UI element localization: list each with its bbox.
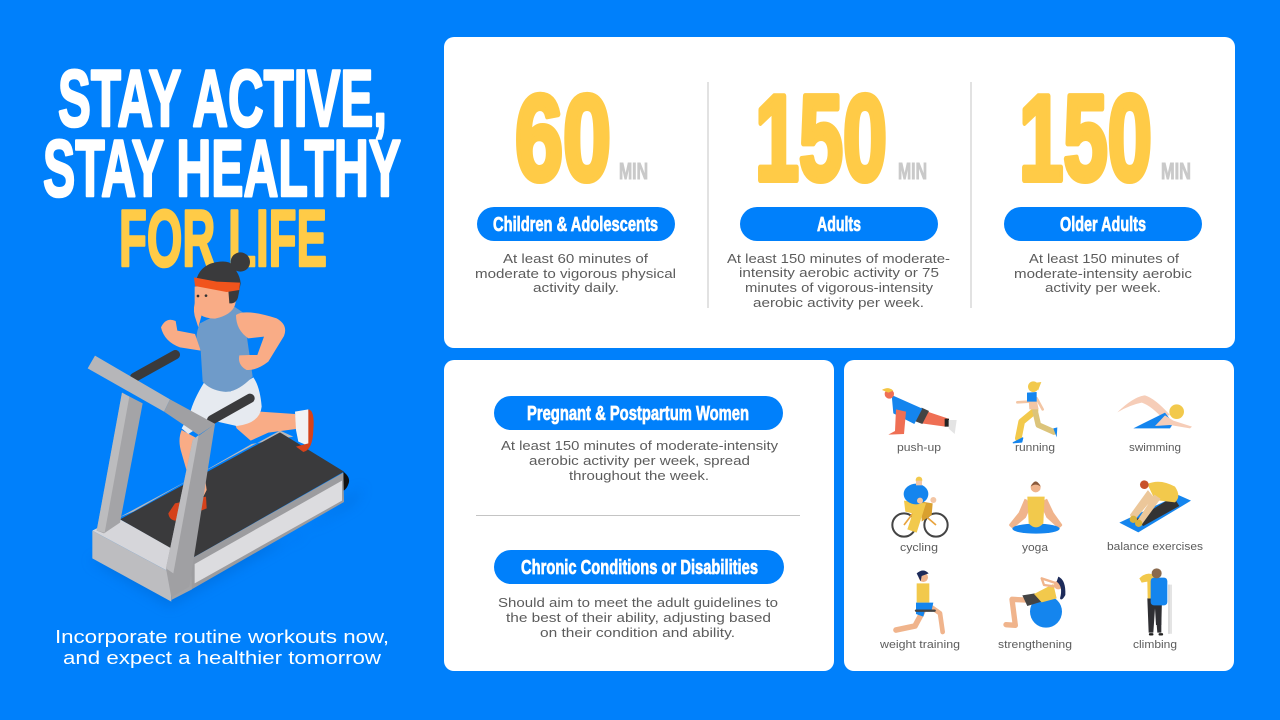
back leg of runner bbox=[233, 409, 314, 452]
front foot of runner bbox=[168, 430, 207, 521]
children stat: 60 bbox=[515, 70, 611, 206]
panel: special populations bbox=[444, 360, 834, 671]
panel: activities bbox=[844, 360, 1234, 671]
label: running: running bbox=[1015, 442, 1055, 454]
chronic conditions text: Should aim to meet the adult guidelines to bbox=[498, 595, 778, 610]
label: swimming: swimming bbox=[1129, 442, 1181, 454]
chronic conditions text: on their condition and ability. bbox=[540, 625, 735, 640]
older adults text: activity per week. bbox=[1045, 280, 1161, 295]
label: push-up: push-up bbox=[897, 442, 941, 454]
shorts bbox=[182, 377, 262, 434]
pregnant text: At least 150 minutes of moderate-intensity bbox=[501, 438, 779, 453]
older adults text: At least 150 minutes of bbox=[1029, 251, 1179, 266]
adults badge: Adults bbox=[817, 214, 861, 236]
icon: yoga bbox=[1011, 481, 1061, 534]
title bbox=[43, 54, 401, 284]
pregnant badge bbox=[494, 396, 783, 430]
chronic conditions text: the best of their ability, adjusting based bbox=[506, 610, 771, 625]
older adults stat: 150 bbox=[1019, 70, 1152, 206]
pregnant text bbox=[501, 438, 779, 483]
panel: age group guidelines bbox=[444, 37, 1235, 348]
illustration: runner on treadmill bbox=[88, 252, 363, 607]
treadmill belt bbox=[119, 431, 349, 559]
children text bbox=[475, 251, 676, 295]
icon: cycling bbox=[892, 477, 948, 537]
chronic conditions badge bbox=[494, 550, 784, 584]
title: STAY ACTIVE, bbox=[58, 54, 387, 144]
icon: climbing bbox=[1139, 568, 1171, 634]
treadmill base bbox=[92, 473, 344, 602]
torso bbox=[196, 306, 253, 392]
icon: push-up bbox=[882, 388, 957, 435]
adults stat: MIN bbox=[898, 158, 927, 184]
adults text: minutes of vigorous-intensity bbox=[745, 280, 934, 295]
chronic conditions text bbox=[498, 595, 778, 640]
label: cycling: cycling bbox=[900, 542, 938, 554]
tagline: Incorporate routine workouts now, bbox=[55, 626, 389, 647]
adults text: aerobic activity per week. bbox=[753, 295, 924, 310]
head bbox=[194, 252, 250, 327]
icon: weight training bbox=[896, 570, 943, 632]
label: balance exercises: balance exercises bbox=[1107, 541, 1204, 553]
older adults stat: MIN bbox=[1161, 158, 1191, 184]
children text: activity daily. bbox=[533, 280, 619, 295]
pregnant text: throughout the week. bbox=[569, 468, 709, 483]
older adults text: moderate-intensity aerobic bbox=[1014, 266, 1193, 281]
older adults badge bbox=[1004, 207, 1202, 241]
icon: strengthening bbox=[1006, 577, 1065, 628]
adults badge bbox=[740, 207, 938, 241]
title: FOR LIFE bbox=[119, 194, 327, 284]
pregnant text: aerobic activity per week, spread bbox=[529, 453, 750, 468]
children text: At least 60 minutes of bbox=[503, 251, 648, 266]
label: climbing: climbing bbox=[1133, 639, 1177, 651]
adults text: At least 150 minutes of moderate- bbox=[727, 251, 950, 266]
adults stat: 150 bbox=[755, 70, 887, 206]
label: strengthening: strengthening bbox=[998, 639, 1072, 651]
older adults badge: Older Adults bbox=[1060, 214, 1146, 236]
label: weight training: weight training bbox=[879, 639, 960, 651]
title: STAY HEALTHY bbox=[43, 124, 401, 214]
children badge: Children & Adolescents bbox=[493, 214, 658, 236]
icon: running bbox=[1013, 381, 1057, 443]
adults text: intensity aerobic activity or 75 bbox=[739, 265, 939, 280]
chronic conditions badge: Chronic Conditions or Disabilities bbox=[521, 557, 758, 579]
pregnant badge: Pregnant & Postpartum Women bbox=[527, 403, 749, 425]
older adults text bbox=[1014, 251, 1193, 295]
icon: swimming bbox=[1117, 395, 1192, 428]
tagline bbox=[55, 626, 389, 668]
treadmill frame and handles bbox=[88, 355, 250, 597]
children badge bbox=[477, 207, 675, 241]
arms bbox=[161, 312, 285, 370]
adults text bbox=[727, 251, 950, 310]
tagline: and expect a healthier tomorrow bbox=[63, 647, 382, 668]
icon: balance exercises bbox=[1119, 480, 1191, 532]
children text: moderate to vigorous physical bbox=[475, 266, 676, 281]
label: yoga: yoga bbox=[1022, 542, 1049, 554]
children stat: MIN bbox=[619, 158, 648, 184]
